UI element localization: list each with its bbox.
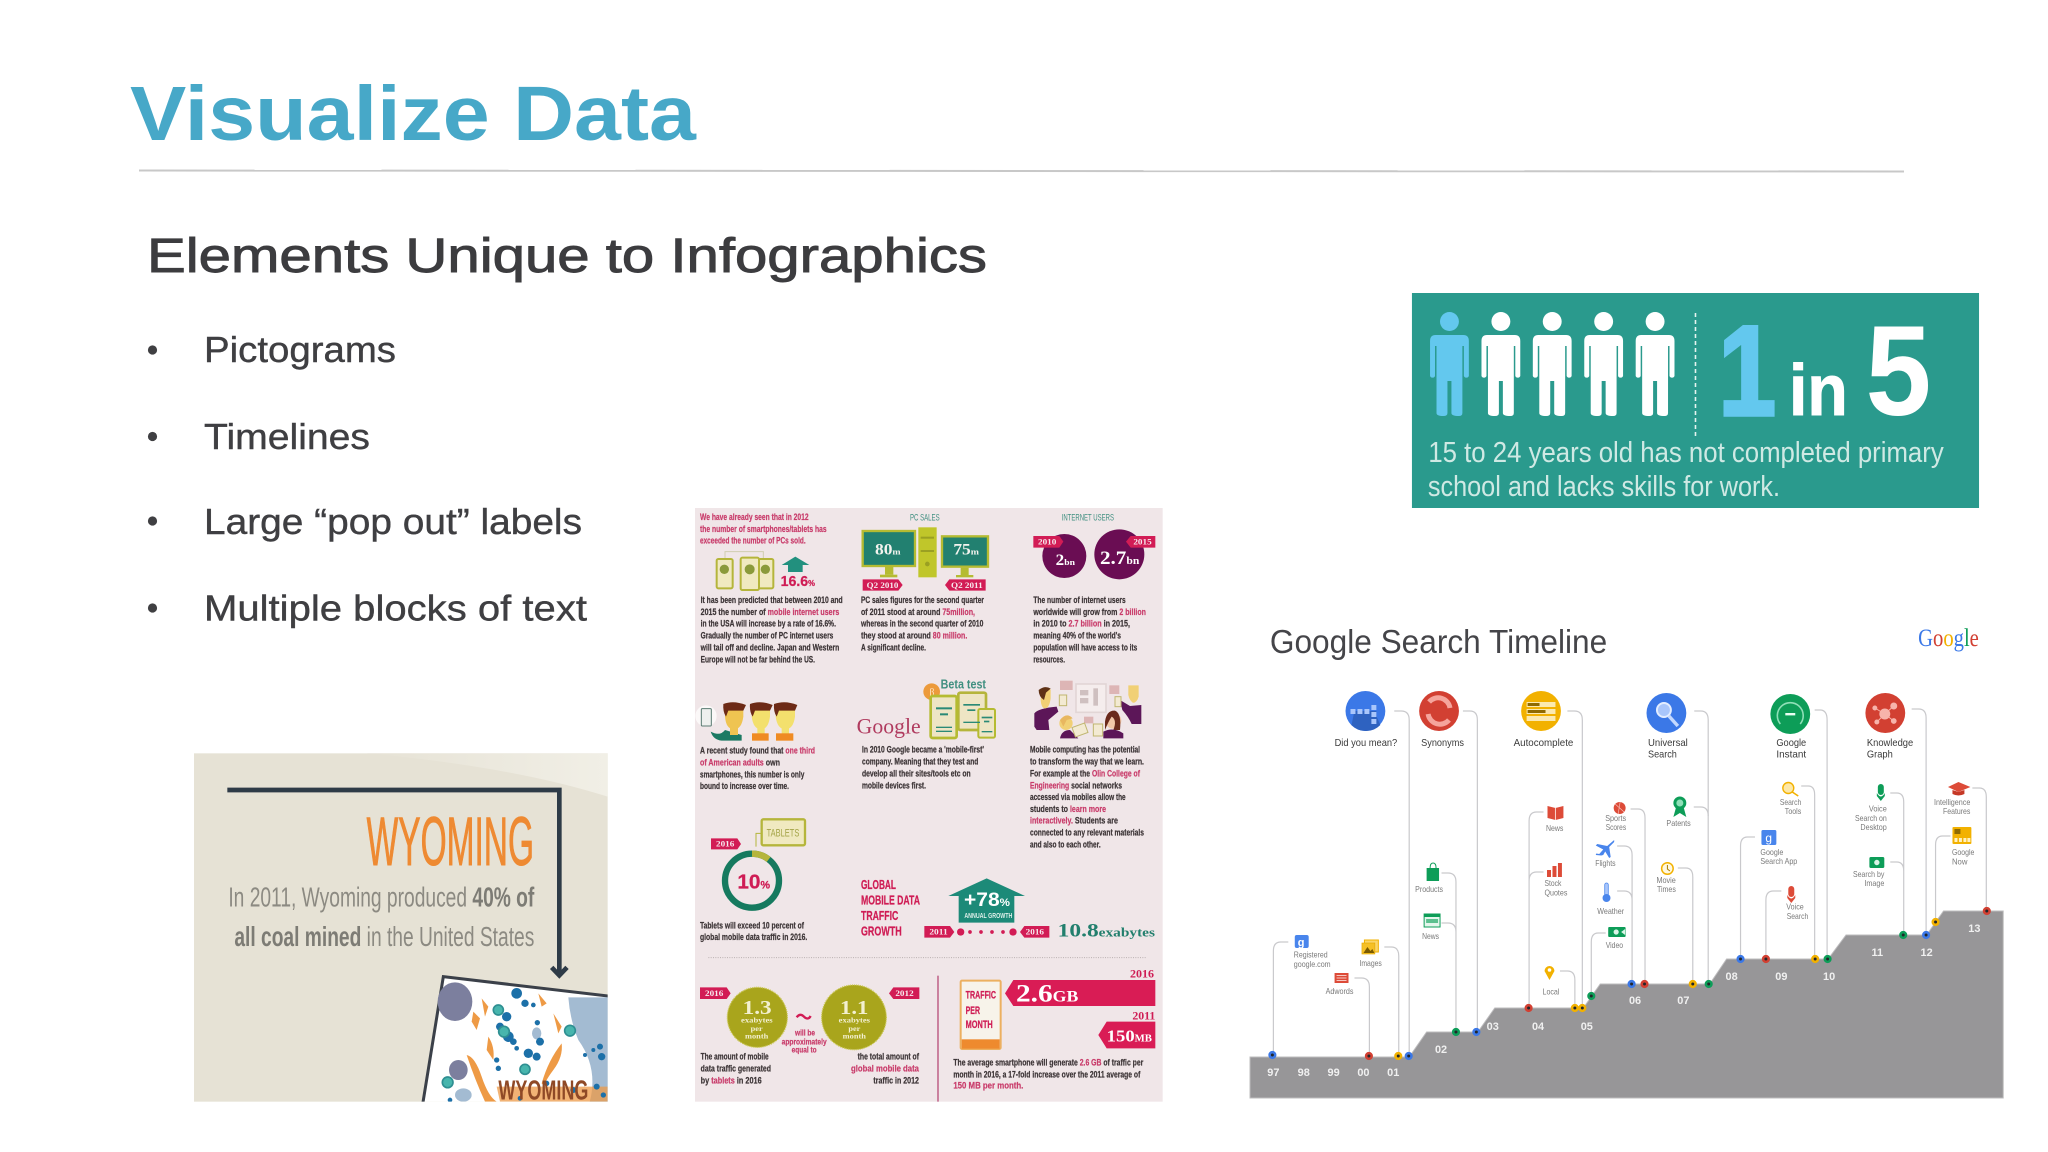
feature: voice search on desktop: Voice xyxy=(1869,804,1887,814)
pc sales graphic: 80m xyxy=(875,541,902,558)
text block: google mobile first: mobile devices first. xyxy=(862,780,926,790)
feature: search by image xyxy=(1853,857,1885,888)
feature: stock quotes: Quotes xyxy=(1545,888,1567,898)
text block: mobile computing: accessed via mobiles allow the xyxy=(1030,792,1126,802)
icon: phones xyxy=(717,552,773,590)
wyoming statistic text: In 2011, Wyoming produced 40% of xyxy=(228,882,535,913)
panel: 1 in 5 statistic xyxy=(1412,293,1979,508)
feature: google now: Google xyxy=(1952,848,1975,857)
year labels: 97 xyxy=(1267,1067,1279,1079)
year labels: 98 xyxy=(1298,1067,1310,1079)
statistic caption: school and lacks skills for work. xyxy=(1428,471,1780,503)
beta test graphic: β xyxy=(929,687,934,698)
text block: pc sales: A significant decline. xyxy=(861,643,926,653)
text block: pc sales: PC sales figures for the second quarter xyxy=(861,595,984,605)
traffic per month chart xyxy=(961,966,1155,1049)
feature: voice search on desktop xyxy=(1855,784,1887,832)
exabytes comparison: will be xyxy=(794,1028,815,1038)
text block: mobile computing xyxy=(1030,745,1144,849)
heading: global mobile data traffic growth: GLOBAL xyxy=(861,877,896,892)
milestone: did you mean: Did you mean? xyxy=(1335,738,1398,749)
text block: tablets vs global traffic xyxy=(701,1052,920,1085)
feature: search tools xyxy=(1780,782,1801,816)
map of wyoming: WYOMING xyxy=(498,1074,588,1105)
pc sales graphic: 75m xyxy=(953,541,980,558)
text block: google mobile first: company. Meaning that they test and xyxy=(862,757,979,767)
text block: mobile computing: to transform the way that we learn. xyxy=(1030,757,1144,767)
pop-out label: 1 in 5 xyxy=(1718,300,1931,443)
text block: mobile computing: For example at the Olin College of xyxy=(1030,768,1141,778)
bullet list: Large “pop out” labels xyxy=(204,501,582,542)
feature: voice search: Search xyxy=(1787,912,1808,921)
wyoming statistic text xyxy=(228,882,535,952)
timeline heading: Google Search Timeline xyxy=(1270,623,1607,660)
feature: weather xyxy=(1597,883,1624,916)
year labels: 00 xyxy=(1357,1067,1370,1079)
milestone: google instant xyxy=(1770,694,1810,761)
pc sales graphic: Q2 2011 xyxy=(951,581,983,590)
text block: google mobile first xyxy=(862,745,984,790)
text block: mobile computing: Mobile computing has the potential xyxy=(1030,745,1140,755)
year labels: 10 xyxy=(1823,971,1835,983)
text block: internet users: resources. xyxy=(1033,655,1065,665)
stepped years chart xyxy=(1250,911,2003,1098)
feature: search tools: Tools xyxy=(1785,807,1801,816)
panel: mobile data infographic xyxy=(695,508,1163,1102)
tablets donut chart: TABLETS xyxy=(767,828,799,840)
text block: prediction: It has been predicted that between 2010 and xyxy=(701,595,843,605)
traffic per month chart: TRAFFIC xyxy=(966,990,996,1002)
text block: google mobile first: In 2010 Google became a 'mobile-first' xyxy=(862,745,984,755)
year labels: 99 xyxy=(1327,1067,1340,1079)
tablets donut chart: 10% xyxy=(737,870,771,893)
beta test graphic: Beta test xyxy=(941,676,986,691)
year labels: 09 xyxy=(1775,971,1787,983)
stat: 16.6 percent: 16.6% xyxy=(781,574,815,590)
intro text: exceeded the number of PCs sold. xyxy=(700,536,806,546)
feature: patents: Patents xyxy=(1666,819,1691,828)
pop-out label: 1 in 5: 5 xyxy=(1866,300,1931,443)
feature: patents xyxy=(1666,796,1691,828)
exabytes comparison: exabytes xyxy=(839,1016,870,1025)
growth arrow with plus 78 percent xyxy=(948,878,1025,923)
feature: products: Products xyxy=(1415,885,1443,894)
growth timeline 2011 to 2016: 2011 xyxy=(929,928,948,937)
exabytes comparison: 1.3 xyxy=(743,997,772,1019)
milestone: did you mean xyxy=(1335,691,1398,749)
text block: prediction: in the USA will increase by a rate of 16.6%. xyxy=(701,619,836,629)
traffic per month chart: 2011 xyxy=(1132,1008,1155,1022)
text block: average smartphone: The average smartphone will generate 2.6 GB of traffic per xyxy=(953,1057,1144,1067)
arrow xyxy=(227,790,567,975)
feature: registered google.com: google.com xyxy=(1294,960,1331,969)
feature: search by image: Search by xyxy=(1853,870,1884,879)
feature: google search app: Google xyxy=(1760,848,1784,857)
traffic per month chart: PER xyxy=(966,1005,980,1017)
connector lines xyxy=(1273,709,1986,1056)
pictogram: five people xyxy=(1430,312,1674,416)
heading: global mobile data traffic growth xyxy=(861,877,920,938)
text block: american adults: bound to increase over time. xyxy=(700,781,789,791)
text block: internet users: meaning 40% of the world's xyxy=(1033,631,1121,641)
milestone: knowledge graph xyxy=(1865,693,1914,761)
text block: average smartphone: 150 MB per month. xyxy=(953,1081,1023,1091)
google logo: Google xyxy=(1918,625,1979,652)
traffic per month chart: 2016 xyxy=(1130,966,1154,980)
exabytes comparison: per xyxy=(751,1024,763,1033)
feature: voice search: Voice xyxy=(1786,902,1804,912)
pop-out label: 1 in 5: 1 xyxy=(1718,300,1776,443)
text block: pc sales xyxy=(860,595,984,653)
exabytes comparison: 1.1 xyxy=(840,997,868,1019)
feature: adwords: Adwords xyxy=(1326,987,1353,996)
feature: stock quotes xyxy=(1545,863,1567,898)
text block: tablets: Tablets will exceed 10 percent of xyxy=(700,920,805,930)
feature: registered google.com: Registered xyxy=(1294,950,1328,960)
exabytes comparison: 2012 xyxy=(895,989,914,998)
feature: voice search on desktop: Desktop xyxy=(1860,823,1887,832)
pictogram: three adults with smartphones xyxy=(695,702,797,741)
milestone: knowledge graph: Knowledge xyxy=(1867,738,1914,749)
text block: internet users: The number of internet users xyxy=(1033,595,1126,605)
feature: flights: Flights xyxy=(1595,859,1616,868)
heading: elements unique to infographics: Elements Unique to Infographics xyxy=(147,230,987,283)
exabytes comparison: month xyxy=(745,1031,768,1040)
text block: tablets vs global traffic: The amount of mobile xyxy=(701,1052,769,1062)
text block: internet users xyxy=(1033,595,1146,665)
feature: sports scores: Sports xyxy=(1605,814,1626,823)
feature: news red: News xyxy=(1546,824,1563,833)
text block: average smartphone xyxy=(953,1057,1144,1091)
text block: tablets vs global traffic: global mobile data xyxy=(851,1064,920,1074)
milestone: autocomplete: Autocomplete xyxy=(1514,738,1574,749)
year labels: 13 xyxy=(1968,923,1980,935)
internet users circles: 2bn xyxy=(1056,552,1075,569)
traffic per month chart: MONTH xyxy=(966,1019,993,1031)
feature: sports scores: Scores xyxy=(1606,823,1626,832)
feature: images: Images xyxy=(1359,959,1382,968)
year labels xyxy=(1267,923,1980,1079)
exabytes comparison: exabytes xyxy=(741,1016,773,1025)
internet users circles: 2010 xyxy=(1038,538,1056,547)
feature: search by image: Image xyxy=(1864,879,1885,888)
feature: intelligence features xyxy=(1934,782,1971,816)
feature: google now: Now xyxy=(1952,857,1968,867)
text block: tablets xyxy=(700,920,807,942)
pc sales graphic: Q2 2010 xyxy=(867,581,898,590)
exabytes comparison: equal to xyxy=(792,1045,817,1055)
exabytes comparison: per xyxy=(848,1024,861,1033)
text block: american adults: A recent study found that one third xyxy=(700,745,815,755)
text block: pc sales: whereas in the second quarter of 2010 xyxy=(860,619,983,629)
beta test graphic xyxy=(923,676,995,738)
heading: global mobile data traffic growth: MOBILE DATA xyxy=(861,893,920,908)
feature: adwords xyxy=(1326,973,1353,996)
google wordmark: Google xyxy=(857,713,921,738)
feature: registered google.com: g xyxy=(1298,937,1304,949)
feature: intelligence features: Features xyxy=(1943,807,1970,816)
text block: american adults xyxy=(700,745,815,791)
text block: prediction: Gradually the number of PC internet users xyxy=(701,631,833,641)
stat: 10.8 exabytes: 10.8exabytes xyxy=(1058,921,1155,942)
panel: google search timeline xyxy=(1250,623,2003,1098)
feature: video: Video xyxy=(1606,941,1624,950)
statistic caption xyxy=(1428,437,1944,503)
feature: voice search xyxy=(1786,886,1808,921)
feature: intelligence features: Intelligence xyxy=(1934,798,1971,807)
milestone: google instant: Google xyxy=(1776,738,1807,749)
milestone: autocomplete xyxy=(1514,691,1574,749)
feature: flights xyxy=(1595,840,1616,868)
exabytes comparison: month xyxy=(843,1031,866,1040)
text block: pc sales: they stood at around 80 million. xyxy=(861,631,967,641)
pictogram: connected learners xyxy=(1034,681,1141,738)
internet users circles: 2015 xyxy=(1133,538,1152,547)
feature: local xyxy=(1543,966,1560,997)
pop-out label: 1 in 5: in xyxy=(1789,351,1848,431)
year labels: 02 xyxy=(1435,1044,1447,1056)
feature: local: Local xyxy=(1543,987,1560,997)
heading: pc sales: PC SALES xyxy=(910,513,940,523)
year labels: 08 xyxy=(1725,971,1738,983)
text block: mobile computing: interactively. Students are xyxy=(1030,816,1118,826)
milestone: universal search: Search xyxy=(1648,749,1677,761)
text block: american adults: smartphones, this number is only xyxy=(700,769,805,779)
growth arrow with plus 78 percent: +78% xyxy=(964,890,1011,911)
feature: news green xyxy=(1422,914,1440,941)
intro text: We have already seen that in 2012 xyxy=(700,512,809,522)
exabytes comparison: 2016 xyxy=(705,989,723,998)
tablets donut chart: 2016 xyxy=(716,840,734,849)
year labels: 06 xyxy=(1629,995,1641,1007)
bullet list xyxy=(148,329,587,628)
feature: news red xyxy=(1546,806,1563,833)
growth timeline 2011 to 2016 xyxy=(924,926,1049,938)
year labels: 12 xyxy=(1921,947,1933,959)
feature: weather: Weather xyxy=(1597,907,1624,916)
milestone: universal search xyxy=(1647,693,1688,761)
text block: mobile computing: Engineering social networks xyxy=(1030,780,1122,790)
year labels: 04 xyxy=(1532,1021,1545,1033)
heading: global mobile data traffic growth: TRAFFIC xyxy=(861,908,899,923)
traffic per month chart: 2.6GB xyxy=(1016,980,1078,1008)
icon: growth arrow xyxy=(782,557,809,572)
year labels: 01 xyxy=(1387,1067,1399,1079)
feature: google search app: g xyxy=(1765,831,1772,845)
text block: internet users: in 2010 to 2.7 billion in 2015, xyxy=(1033,619,1130,629)
title: Visualize Data xyxy=(130,71,697,157)
bullet list: Multiple blocks of text xyxy=(204,588,587,628)
text block: tablets vs global traffic: data traffic generated xyxy=(701,1064,771,1074)
growth timeline 2011 to 2016: 2016 xyxy=(1026,928,1044,937)
text block: tablets vs global traffic: traffic in 2012 xyxy=(873,1075,919,1085)
heading: internet users: INTERNET USERS xyxy=(1062,513,1114,523)
feature: movie times: Times xyxy=(1657,885,1676,894)
internet users circles: 2.7bn xyxy=(1100,548,1139,569)
timeline milestone dots xyxy=(1270,908,1990,1059)
exabytes comparison xyxy=(700,985,919,1055)
text block: mobile computing: and also to each other. xyxy=(1030,839,1101,849)
wyoming statistic text: all coal mined in the United States xyxy=(234,921,534,952)
statistic caption: 15 to 24 years old has not completed primary xyxy=(1428,437,1944,469)
feature: stock quotes: Stock xyxy=(1545,879,1561,888)
panel: wyoming callout xyxy=(194,753,613,1117)
year labels: 11 xyxy=(1872,947,1883,959)
milestone: google instant: Instant xyxy=(1776,749,1806,761)
panel: wyoming callout: WYOMING xyxy=(367,804,534,880)
feature: products xyxy=(1415,863,1443,894)
feature: google search app: Search App xyxy=(1760,857,1798,866)
bullet list: Pictograms xyxy=(204,329,396,370)
exabytes comparison: approximately xyxy=(782,1036,827,1046)
milestone: synonyms: Synonyms xyxy=(1421,738,1464,749)
year labels: 05 xyxy=(1581,1021,1593,1033)
intro text: the number of smartphones/tablets has xyxy=(700,524,827,534)
feature: google now xyxy=(1952,827,1975,867)
text block: american adults: of American adults own xyxy=(700,757,780,767)
milestone: universal search: Universal xyxy=(1648,738,1688,749)
feature: voice search on desktop: Search on xyxy=(1855,814,1887,823)
text block: tablets vs global traffic: the total amount of xyxy=(858,1052,920,1062)
year labels: 03 xyxy=(1487,1021,1499,1033)
tablets donut chart xyxy=(711,819,805,908)
text block: internet users: population will have access to its xyxy=(1033,643,1137,653)
feature: movie times: Movie xyxy=(1656,876,1676,885)
growth arrow with plus 78 percent: ANNUAL GROWTH xyxy=(964,911,1012,920)
feature: images xyxy=(1359,940,1382,968)
pc sales graphic xyxy=(863,527,988,591)
feature: news green: News xyxy=(1422,932,1439,941)
intro text xyxy=(700,512,827,546)
milestone: synonyms xyxy=(1419,691,1464,749)
feature: registered google.com xyxy=(1294,935,1331,969)
feature: video xyxy=(1606,927,1626,950)
bullet list: Timelines xyxy=(204,416,370,457)
text block: tablets vs global traffic: by tablets in 2016 xyxy=(701,1075,762,1085)
text block: google mobile first: develop all their sites/tools etc on xyxy=(862,768,971,778)
milestone: knowledge graph: Graph xyxy=(1867,749,1893,761)
text block: prediction: 2015 the number of mobile internet users xyxy=(701,607,839,617)
traffic per month chart: 150MB xyxy=(1107,1027,1152,1046)
feature: sports scores xyxy=(1605,802,1626,832)
feature: google search app xyxy=(1760,830,1798,866)
text block: mobile computing: students to learn more xyxy=(1030,804,1106,814)
text block: internet users: worldwide will grow from 2 billion xyxy=(1033,607,1146,617)
text block: prediction: Europe will not be far behind the US. xyxy=(701,655,815,665)
feature: movie times xyxy=(1656,863,1676,894)
text block: prediction xyxy=(700,595,843,665)
text block: average smartphone: month in 2016, a 17-fold increase over the 2011 average of xyxy=(953,1069,1141,1079)
map of wyoming xyxy=(422,975,608,1102)
text block: tablets: global mobile data traffic in 2016. xyxy=(700,932,807,942)
feature: search tools: Search xyxy=(1780,798,1801,807)
text block: prediction: will tail off and decline. Japan and Western xyxy=(700,643,840,653)
text block: mobile computing: connected to any relevant materials xyxy=(1030,828,1144,838)
year labels: 07 xyxy=(1677,995,1689,1007)
text block: pc sales: of 2011 stood at around 75million, xyxy=(861,607,975,617)
heading: global mobile data traffic growth: GROWTH xyxy=(861,923,902,938)
internet users circles xyxy=(1033,529,1155,579)
